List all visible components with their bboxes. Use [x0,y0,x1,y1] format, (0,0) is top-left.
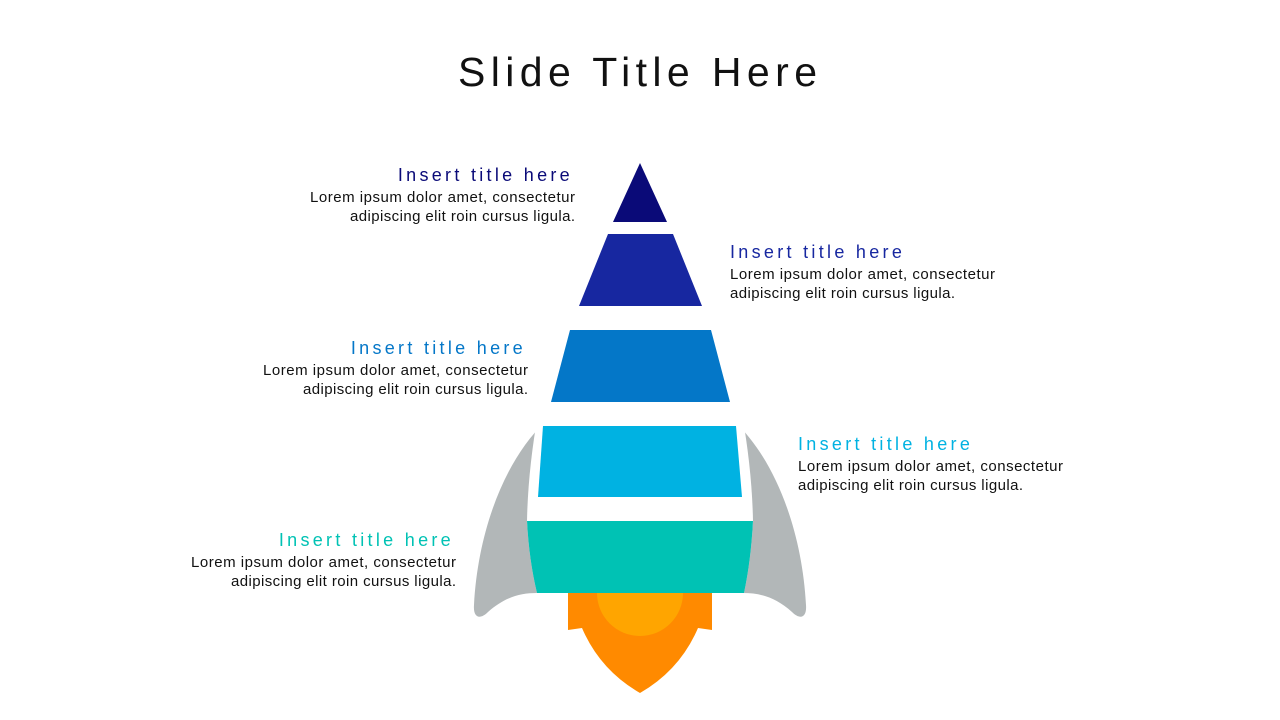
text block 4: Insert title here [798,434,973,454]
text block 2: Lorem ipsum dolor amet, consectetur [730,266,995,283]
text block 3: adipiscing elit roin cursus ligula. [303,381,528,398]
segment 3 [551,330,730,402]
text block 1: Lorem ipsum dolor amet, consectetur [310,189,575,206]
text block 4 [798,434,1063,494]
body [527,414,753,593]
flame [568,593,712,693]
text block 5: Insert title here [279,530,454,550]
segment 2 [579,234,702,306]
segment 5 [527,521,753,593]
text block 5: adipiscing elit roin cursus ligula. [231,573,456,590]
text block 2: adipiscing elit roin cursus ligula. [730,285,955,302]
text block 2: Insert title here [730,242,905,262]
title: Slide Title Here [458,49,820,95]
text block 2 [730,242,995,302]
text block 5: Lorem ipsum dolor amet, consectetur [191,554,456,571]
text block 3: Lorem ipsum dolor amet, consectetur [263,362,528,379]
right fin [735,422,806,617]
rocket [474,163,806,693]
text block 4: adipiscing elit roin cursus ligula. [798,477,1023,494]
text block 3 [263,338,528,398]
text block 4: Lorem ipsum dolor amet, consectetur [798,458,1063,475]
segment 1 [613,163,667,222]
text block 3: Insert title here [351,338,526,358]
text block 1: Insert title here [398,165,573,185]
text block 1: adipiscing elit roin cursus ligula. [350,208,575,225]
left fin [474,422,545,617]
text block 5 [191,530,456,590]
text block 1 [310,165,575,225]
segment 4 [538,426,742,497]
